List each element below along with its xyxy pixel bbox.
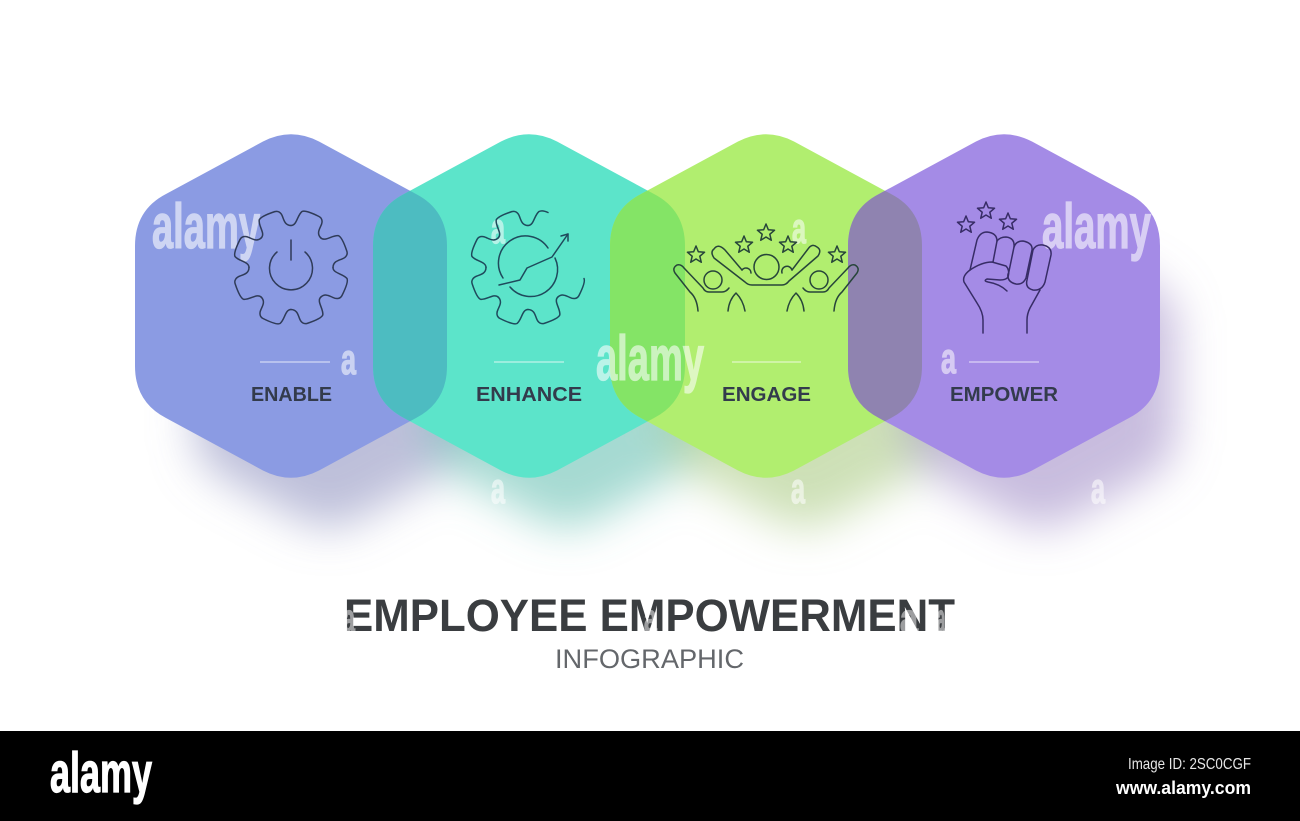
- label: enable: ENABLE: [251, 384, 332, 406]
- icon: gear with power symbol: [229, 206, 353, 329]
- hexagon drop shadows: [195, 232, 1176, 528]
- subtitle: INFOGRAPHIC: [555, 644, 744, 674]
- panel: enable hexagon: [135, 134, 447, 478]
- overlap: engage and empower: [848, 190, 922, 422]
- watermark: alamy right: alamy: [1042, 192, 1151, 262]
- footer url: www.alamy.com: [1115, 778, 1251, 798]
- watermark: alamy left: alamy: [152, 192, 260, 262]
- footer image id: Image ID: 2SC0CGF: [1128, 756, 1251, 773]
- footer logo: alamy: [50, 741, 152, 805]
- footer bar: [0, 731, 1300, 821]
- title: EMPLOYEE EMPOWERMENT: [344, 590, 955, 641]
- watermark: marks over title: a: [644, 597, 657, 641]
- watermark: small marks: a: [792, 205, 807, 253]
- watermark: small marks: a: [491, 465, 506, 513]
- watermark: small marks: a: [491, 205, 506, 253]
- icon: team with stars: [674, 224, 858, 311]
- label: enhance: ENHANCE: [476, 384, 582, 406]
- divider lines: [260, 361, 1039, 363]
- overlap: enhance and engage: [610, 190, 685, 422]
- label: empower: EMPOWER: [950, 384, 1059, 406]
- panel: enhance hexagon: [373, 134, 685, 478]
- text: a: [937, 597, 945, 641]
- watermark: marks over title: a: [343, 597, 355, 641]
- watermark: small marks: [341, 205, 1106, 513]
- watermark: marks over title: [343, 597, 945, 641]
- watermark: small marks: a: [791, 465, 806, 513]
- overlap: enable and enhance: [373, 190, 447, 422]
- watermark: alamy centre: alamy: [596, 324, 704, 394]
- panel: engage hexagon: [610, 134, 922, 478]
- watermark: small marks: a: [1091, 465, 1106, 513]
- label: engage: ENGAGE: [722, 384, 811, 406]
- icon: gear with growth arrow: [466, 206, 584, 329]
- icon: raised fist with stars: [957, 202, 1051, 333]
- panel: empower hexagon: [848, 134, 1160, 478]
- watermark: small marks: a: [341, 336, 357, 384]
- watermark: small marks: a: [941, 335, 957, 383]
- watermark: marks over title: a: [900, 597, 919, 641]
